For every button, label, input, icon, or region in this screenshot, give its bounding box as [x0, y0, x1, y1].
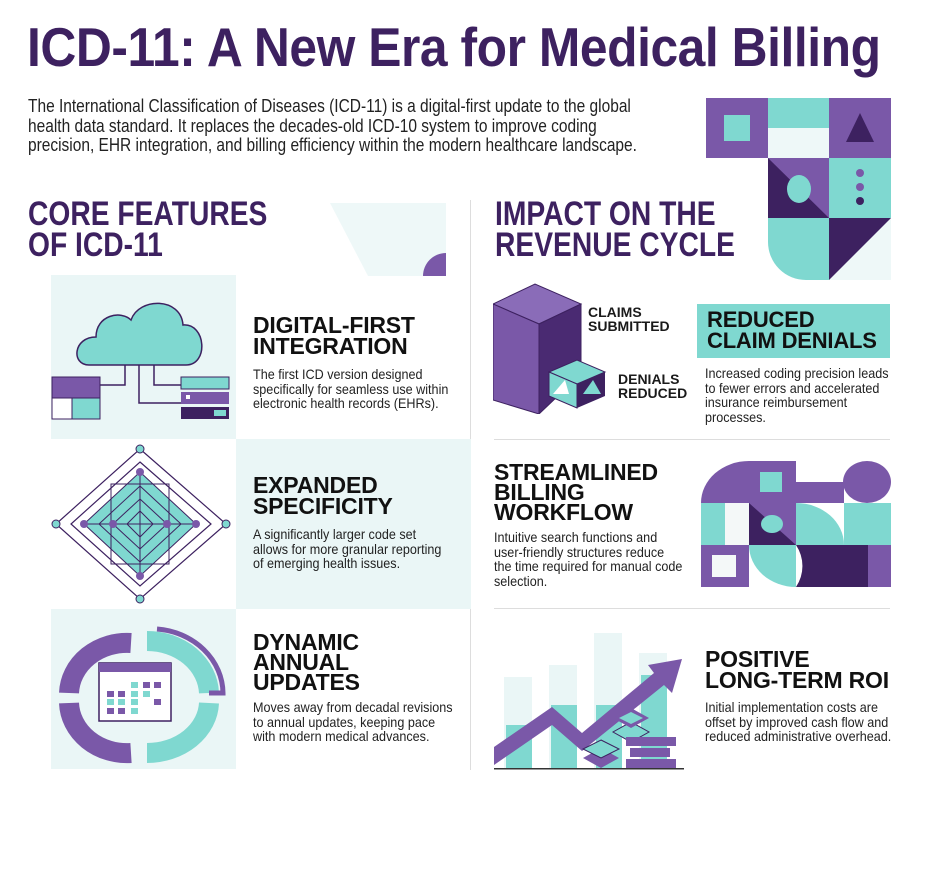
- text: Intuitive search functions and: [494, 529, 657, 545]
- icon: diamond grid: [52, 444, 230, 604]
- icon: calendar ring: [51, 609, 236, 769]
- icon: claims cube: [493, 284, 606, 414]
- text: offset by improved cash flow and: [705, 714, 888, 730]
- divider: [470, 200, 471, 770]
- text: BILLING: [494, 479, 585, 505]
- text: dynamic updates: with modern medical advances.: [253, 728, 429, 744]
- text: WORKFLOW: [494, 499, 633, 525]
- intro text: The International Classification of Diseases (ICD-11) is a digital-first update to the global: [28, 96, 631, 116]
- text: digital-first: DIGITAL-FIRST: [253, 312, 415, 338]
- icon: cloud network: [51, 275, 236, 439]
- intro text: health data standard. It replaces the decades-old ICD-10 system to improve coding: [28, 116, 597, 136]
- panel: positive ROI: [494, 633, 891, 770]
- heading: impact: REVENUE CYCLE: [495, 226, 735, 264]
- text: user-friendly structures reduce: [494, 544, 664, 560]
- text: digital-first: [253, 312, 448, 411]
- text: Increased coding precision leads: [705, 365, 889, 381]
- panel: expanded specificity: EXPANDED: [253, 472, 378, 498]
- title: ICD-11: A New Era for Medical Billing: [27, 16, 881, 78]
- panel: expanded specificity: allows for more granular reporting: [253, 540, 441, 556]
- text: Initial implementation costs are: [705, 699, 878, 715]
- text: POSITIVE: [705, 646, 809, 672]
- label: claims submitted: CLAIMS: [588, 304, 642, 320]
- text: selection.: [494, 572, 547, 588]
- icon: top geometric mosaic: [706, 98, 891, 280]
- text: [705, 646, 891, 744]
- icon: mosaic: [701, 461, 891, 587]
- label: denials reduced: REDUCED: [618, 385, 687, 401]
- icon: growth chart: [494, 633, 684, 770]
- text: expanded specificity: [236, 439, 471, 609]
- panel: streamlined workflow: [494, 459, 891, 588]
- text: STREAMLINED: [494, 459, 658, 485]
- text: dynamic updates: Moves away from decadal revisions: [253, 699, 453, 715]
- text: digital-first: The first ICD version designed: [253, 366, 422, 382]
- label: denials reduced: [618, 371, 687, 401]
- panel: expanded specificity: [52, 439, 471, 609]
- text: insurance reimbursement: [705, 394, 847, 410]
- text: the time required for manual code: [494, 558, 682, 574]
- panel: expanded specificity: A significantly larger code set: [253, 526, 416, 542]
- text: LONG-TERM ROI: [705, 667, 889, 693]
- label: claims submitted: SUBMITTED: [588, 318, 670, 334]
- text: processes.: [705, 408, 766, 424]
- heading: impact: IMPACT ON THE: [495, 195, 716, 233]
- intro text: [28, 96, 637, 155]
- label: denials reduced: DENIALS: [618, 371, 679, 387]
- text: digital-first: electronic health records (EHRs).: [253, 395, 439, 411]
- teal heading box: CLAIM DENIALS: [707, 328, 877, 353]
- text: dynamic updates: DYNAMIC: [253, 629, 359, 655]
- decorative block: [330, 203, 446, 276]
- text: dynamic updates: [253, 629, 453, 744]
- teal heading box: [697, 304, 890, 358]
- panel: reduced claim denials: [493, 284, 890, 425]
- panel: dynamic updates: [51, 609, 453, 769]
- text: digital-first: INTEGRATION: [253, 333, 408, 359]
- text: digital-first: specifically for seamless use within: [253, 380, 448, 396]
- panel: expanded specificity: SPECIFICITY: [253, 493, 393, 519]
- text: to fewer errors and accelerated: [705, 380, 879, 396]
- panel: expanded specificity: of emerging health issues.: [253, 555, 400, 571]
- text: reduced administrative overhead.: [705, 728, 891, 744]
- text: [705, 365, 889, 425]
- heading: core features: OF ICD-11: [28, 226, 163, 264]
- teal heading box: REDUCED: [707, 307, 814, 332]
- text: [494, 459, 682, 588]
- text: dynamic updates: to annual updates, keeping pace: [253, 714, 435, 730]
- label: claims submitted: [588, 304, 670, 334]
- panel: digital-first: [51, 275, 448, 439]
- text: dynamic updates: UPDATES: [253, 669, 360, 695]
- heading: impact: [495, 195, 735, 264]
- intro text: precision, EHR integration, and billing efficiency within the modern healthcare landscape.: [28, 135, 637, 155]
- heading: core features: [28, 195, 267, 264]
- text: dynamic updates: ANNUAL: [253, 649, 349, 675]
- heading: core features: CORE FEATURES: [28, 195, 267, 233]
